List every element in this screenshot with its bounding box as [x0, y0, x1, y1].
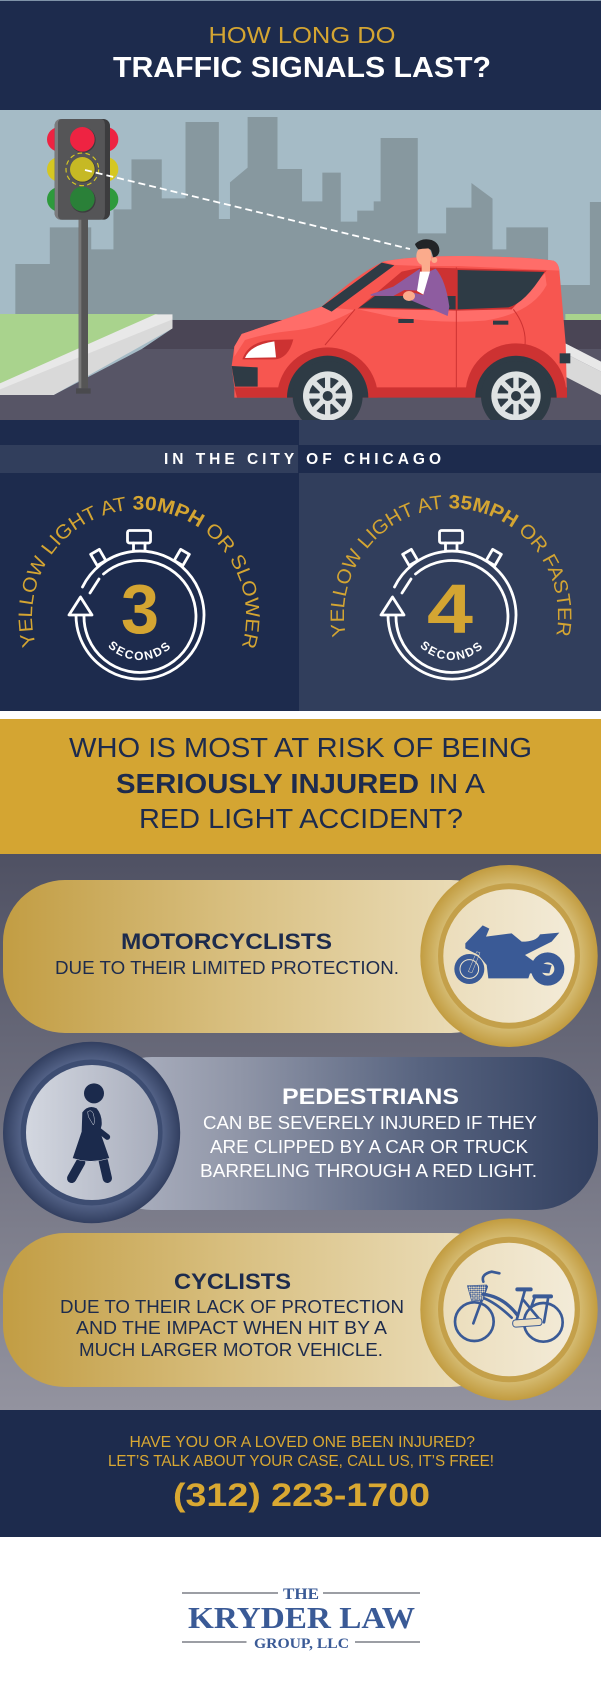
label: seconds: SECONDS: [420, 642, 482, 660]
text: cyclists description: MUCH LARGER MOTOR VEHICLE.: [79, 1340, 383, 1360]
traffic light: [47, 119, 118, 394]
text: cyclists description: [60, 1297, 404, 1360]
heading: how long do: HOW LONG DO: [208, 22, 396, 48]
card: cyclists: [3, 1218, 598, 1400]
icon: stopwatch 4 seconds: 4: [427, 570, 473, 648]
rear wheel: [475, 356, 557, 431]
title: pedestrians: PEDESTRIANS: [282, 1084, 459, 1109]
icon: motorcycle: [454, 925, 564, 986]
text: pedestrians description: [200, 1113, 537, 1181]
text: cyclists description: AND THE IMPACT WHEN HIT BY A: [76, 1318, 387, 1338]
text: pedestrians description: CAN BE SEVERELY INJURED IF THEY: [203, 1113, 537, 1133]
banner: in the city of chicago: [0, 445, 601, 473]
icon: stopwatch 3 seconds: SECONDS: [108, 642, 170, 660]
panel: title banner: [0, 0, 601, 110]
card: pedestrians: [3, 1042, 598, 1223]
arc label: yellow light at 35mph or faster: YELLOW LIGHT AT 35MPH OR FASTER: [330, 494, 572, 638]
text: pedestrians description: BARRELING THROUGH A RED LIGHT.: [200, 1161, 537, 1181]
icon: walking woman: [72, 1083, 109, 1178]
logo: the kryder law group: KRYDER LAW: [188, 1600, 415, 1635]
text: limited protection: DUE TO THEIR LIMITED PROTECTION.: [55, 958, 399, 978]
heading line 2: IN A: [428, 768, 485, 799]
driver: [371, 239, 449, 316]
icon: bicycle: [455, 1272, 563, 1342]
text: pedestrians description: ARE CLIPPED BY A CAR OR TRUCK: [210, 1137, 528, 1157]
panel: 30 mph yellow light: [0, 420, 299, 711]
arc label: yellow light at 30mph or slower: YELLOW LIGHT AT 30MPH OR SLOWER: [18, 496, 260, 648]
logo: the kryder law group: GROUP, LLC: [254, 1636, 349, 1652]
text: cyclists description: DUE TO THEIR LACK OF PROTECTION: [60, 1297, 404, 1317]
red car with driver: [232, 239, 570, 431]
banner: in the city of chicago: IN THE CITY OF CHICAGO: [164, 451, 441, 468]
panel: 35 mph yellow light: [299, 420, 601, 711]
logo: the kryder law group: [182, 1586, 420, 1652]
phone number: (312) 223-1700: [173, 1477, 430, 1513]
heading: traffic signals last: TRAFFIC SIGNALS LAST?: [113, 52, 491, 84]
title: motorcyclists: MOTORCYCLISTS: [121, 929, 332, 954]
text: have you been injured: HAVE YOU OR A LOVED ONE BEEN INJURED?: [130, 1434, 475, 1451]
card: motorcyclists: [3, 865, 598, 1047]
heading line 3: RED LIGHT ACCIDENT?: [139, 803, 463, 834]
panel: risk heading: [0, 719, 601, 854]
heading line 1: WHO IS MOST AT RISK OF BEING: [69, 732, 532, 763]
text: talk about your case: LET’S TALK ABOUT YOUR CASE, CALL US, IT’S FREE!: [108, 1453, 494, 1470]
icon: stopwatch 4 seconds: [381, 530, 516, 679]
title: cyclists: CYCLISTS: [174, 1269, 291, 1294]
heading line 2: SERIOUSLY INJURED: [116, 768, 419, 799]
logo: the kryder law group: THE: [283, 1586, 319, 1603]
icon: stopwatch 3 seconds: 3: [121, 570, 159, 648]
sight line from driver to signal: [85, 170, 410, 249]
city skyline: [0, 117, 601, 421]
panel: risk groups background: [0, 854, 601, 1410]
panel: call to action: [0, 1410, 601, 1537]
icon: stopwatch 3 seconds: [68, 529, 206, 680]
front wheel: [287, 356, 368, 431]
illustration: street scene: [0, 110, 601, 431]
